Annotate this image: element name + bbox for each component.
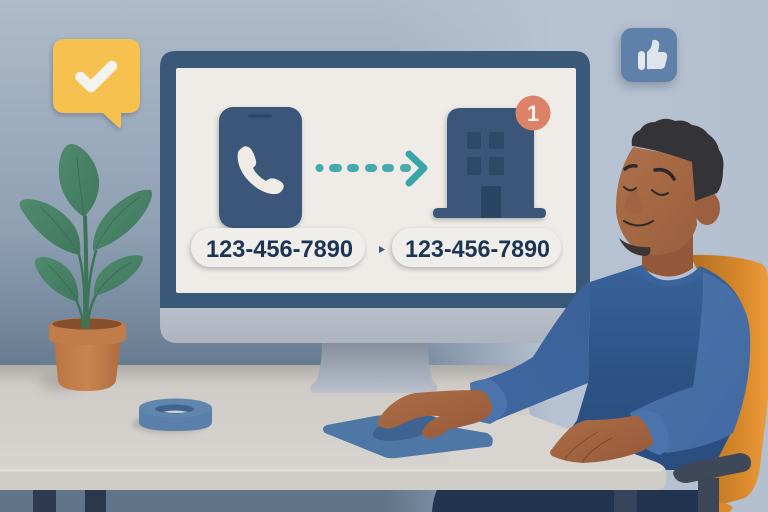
notification badge: 1 (527, 101, 539, 126)
monitor (160, 51, 590, 343)
chair armrest (673, 453, 751, 512)
icon: thumbs-up tile (621, 28, 677, 82)
closed eyes (624, 187, 668, 195)
smile (624, 221, 653, 226)
icon: yellow check speech bubble (53, 39, 140, 128)
screen (176, 68, 576, 293)
eyebrows (625, 166, 674, 179)
monitor stand (310, 340, 437, 393)
trousers (432, 490, 712, 512)
phone number pill: new: 123-456-7890 (405, 236, 550, 263)
desk overlap (450, 415, 666, 490)
flower pot (49, 318, 126, 391)
right hand (550, 415, 653, 463)
phone number pill: new (392, 228, 561, 267)
dotted arrow (316, 154, 424, 183)
left cuff (470, 379, 507, 424)
finger lines (565, 432, 612, 462)
person (432, 228, 748, 512)
right cuff (630, 411, 669, 455)
left sleeve (470, 280, 590, 423)
hair (632, 119, 724, 201)
person arms and head (378, 119, 750, 463)
phone number pill: old: 123-456-7890 (206, 236, 353, 263)
monitor chin (160, 300, 590, 343)
monitor bezel (160, 51, 590, 308)
torso (570, 265, 748, 470)
phone number pill: old (191, 228, 365, 267)
ring coaster (132, 398, 212, 433)
notification badge (516, 96, 550, 130)
leaf veins (40, 158, 140, 300)
computer mouse (370, 410, 442, 446)
icon: smartphone (219, 107, 302, 228)
plant leaves (20, 144, 152, 302)
sweater collar (636, 265, 705, 286)
small arrowhead (379, 246, 385, 253)
desk support post (614, 490, 637, 512)
right sleeve (630, 272, 750, 453)
desk (0, 365, 666, 512)
neck (642, 228, 693, 276)
left hand (378, 390, 492, 438)
nose (624, 190, 643, 213)
mouse pad (323, 416, 493, 458)
chair (673, 255, 768, 512)
face (616, 147, 697, 255)
ear (694, 191, 720, 225)
icon: office building (433, 108, 546, 218)
plant (20, 144, 152, 391)
beard (619, 238, 650, 256)
plant stems (77, 217, 96, 327)
